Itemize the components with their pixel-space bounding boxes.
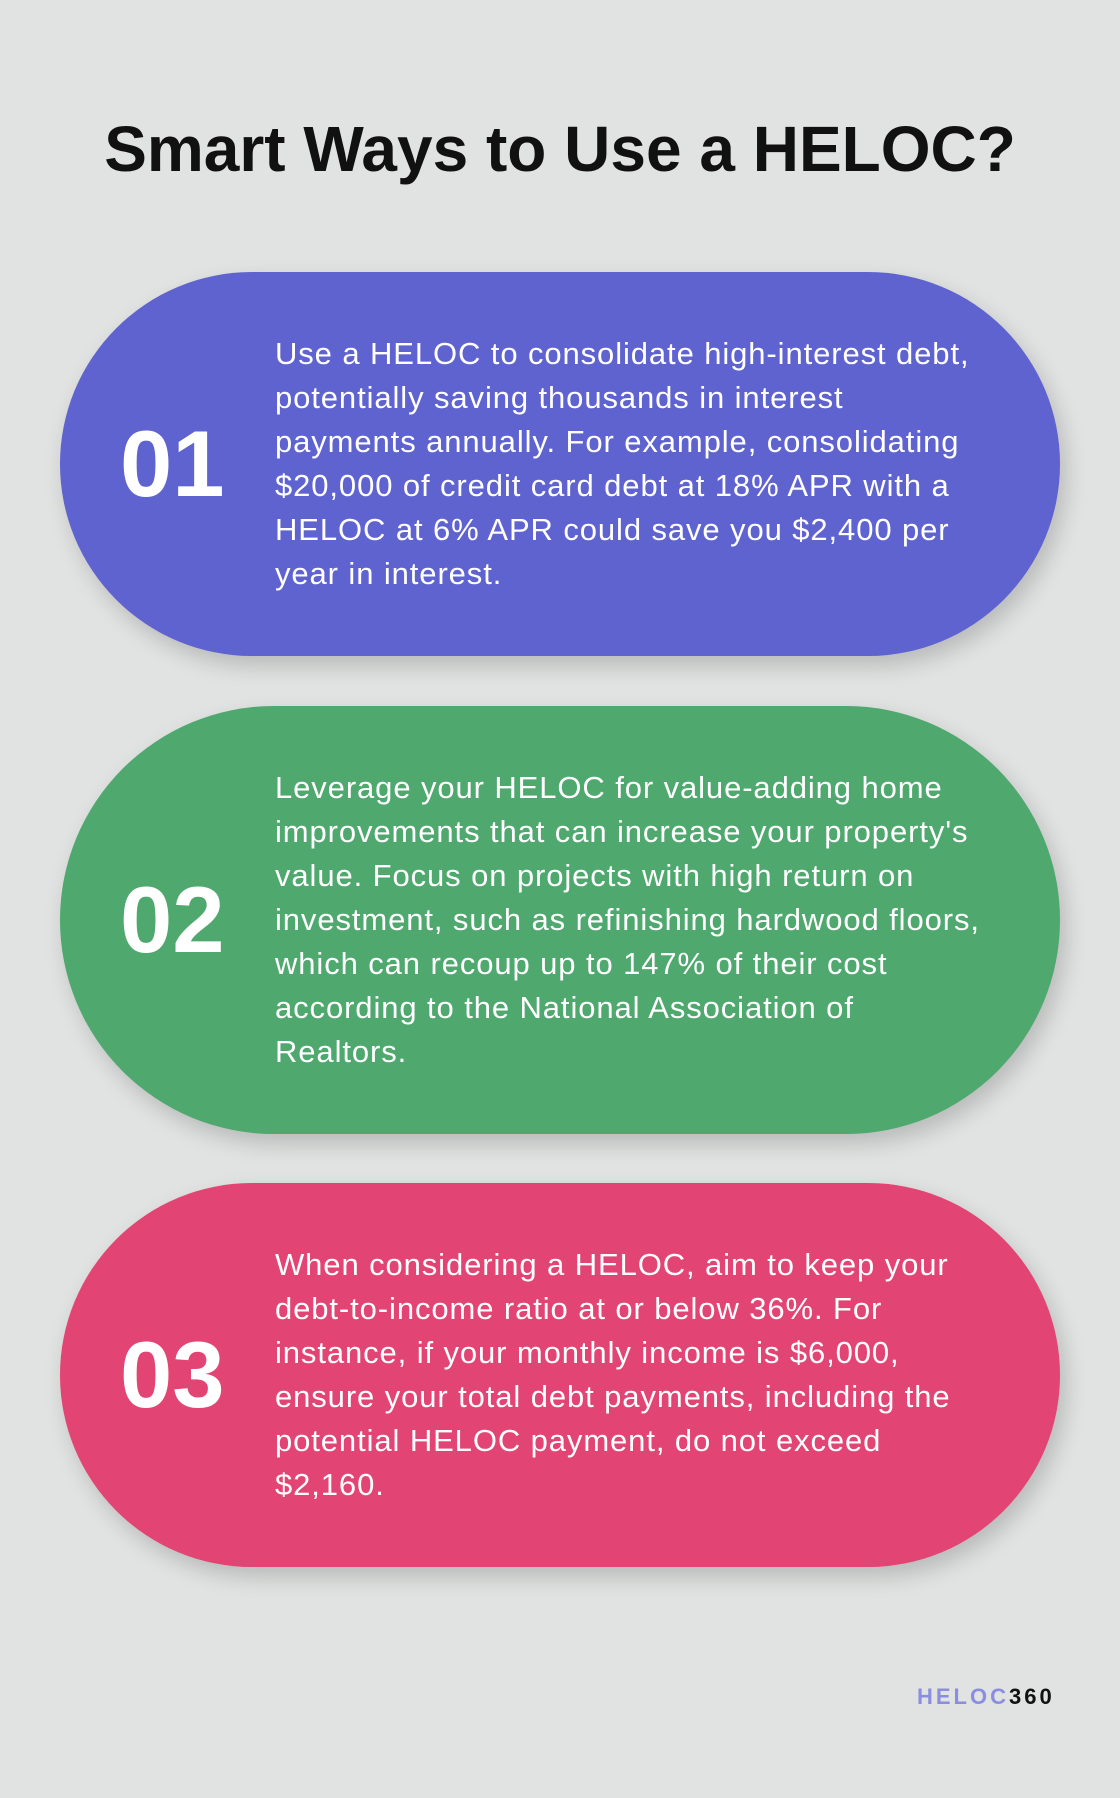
text 01 (275, 336, 969, 591)
text 02: Leverage your HELOC for value-adding home (275, 770, 943, 805)
text 03: potential HELOC payment, do not exceed (275, 1423, 881, 1458)
title: Smart Ways to Use a HELOC? (104, 113, 1016, 185)
text 01: Use a HELOC to consolidate high-interest debt, (275, 336, 969, 371)
text 03: debt-to-income ratio at or below 36%. For (275, 1291, 882, 1326)
text 01: year in interest. (275, 556, 502, 591)
text 02: Realtors. (275, 1034, 407, 1069)
text 03: ensure your total debt payments, including the (275, 1379, 951, 1414)
panel: 03 debt-to-income (60, 1183, 1060, 1567)
text 02: improvements that can increase your property's (275, 814, 968, 849)
text 01: potentially saving thousands in interest (275, 380, 844, 415)
text 02: value. Focus on projects with high return on (275, 858, 914, 893)
number 02: 02 (120, 867, 225, 972)
number 03: 03 (120, 1322, 225, 1427)
text 01: payments annually. For example, consolidating (275, 424, 959, 459)
text 02: investment, such as refinishing hardwood floors, (275, 902, 980, 937)
logo: HELOC360 (917, 1684, 1055, 1709)
panel: 02 home improvements (60, 706, 1060, 1134)
text 03: $2,160. (275, 1467, 385, 1502)
panel: 01 debt consolidation (60, 272, 1060, 656)
text 03 (275, 1247, 951, 1502)
text 02 (275, 770, 980, 1069)
text 03: instance, if your monthly income is $6,000, (275, 1335, 900, 1370)
text 01: $20,000 of credit card debt at 18% APR with a (275, 468, 950, 503)
text 02: according to the National Association of (275, 990, 854, 1025)
text 02: which can recoup up to 147% of their cost (275, 946, 887, 981)
text 01: HELOC at 6% APR could save you $2,400 per (275, 512, 950, 547)
text 03: When considering a HELOC, aim to keep your (275, 1247, 949, 1282)
number 01: 01 (120, 411, 225, 516)
